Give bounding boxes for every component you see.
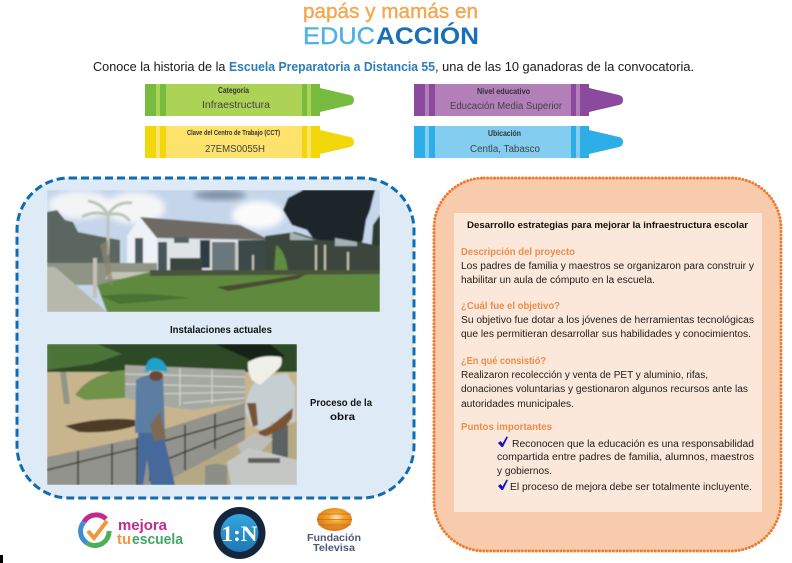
logo tagline: papás y mamás en (303, 1, 478, 23)
logo: mejora tu escuela (81, 515, 184, 548)
section: cuál fue el objetivo: que les permitieran desarrollar sus habilidades y conocimientos. (461, 329, 751, 340)
logo: mejora tu escuela: tu (117, 532, 131, 548)
intro sentence: Escuela Preparatoria a Distancia 55 (229, 59, 435, 74)
crayon: clave del centro de trabajo: Clave del Centro de Trabajo (CCT) (187, 130, 280, 137)
crayon: categoría: Categoría (218, 86, 249, 95)
section: cuál fue el objetivo (461, 301, 754, 340)
caption: proceso de la obra: Proceso de la (310, 398, 372, 409)
section: puntos importantes: y gobiernos. (497, 466, 552, 477)
intro sentence: Conoce la historia de la (93, 59, 229, 74)
section: descripción del proyecto: Descripción del proyecto (461, 247, 575, 258)
icon: orange globe (317, 508, 352, 531)
crayon: ubicación: Centla, Tabasco (470, 144, 540, 155)
caption: proceso de la obra: obra (330, 412, 356, 423)
logo: Fundación Televisa (307, 508, 361, 554)
icon: check mark (498, 436, 508, 447)
crayon: ubicación (414, 126, 623, 158)
logo: papás y mamás en EducAcción: ACCIÓN (376, 22, 479, 50)
section: descripción del proyecto: Los padres de familia y maestros se organizaron para construir y (461, 261, 754, 272)
section: descripción del proyecto (461, 247, 754, 286)
section: puntos importantes: El proceso de mejora debe ser totalmente incluyente. (510, 482, 752, 493)
logo: mejora tu escuela: mejora (118, 518, 168, 534)
section: puntos importantes: Reconocen que la educación es una responsabilidad (512, 439, 754, 450)
crayon: clave del centro de trabajo: 27EMS0055H (205, 144, 265, 155)
section: en qué consistió: Realizaron recolección y venta de PET y aluminio, rifas, (461, 370, 708, 381)
section: en qué consistió: autoridades municipales. (461, 399, 574, 410)
crayon: nivel educativo: Nivel educativo (477, 87, 530, 96)
section: puntos importantes: compartida entre padres de familia, alumnos, maestros (497, 452, 754, 463)
section: puntos importantes: Puntos importantes (461, 422, 552, 433)
caption: instalaciones actuales: Instalaciones actuales (170, 325, 272, 336)
logo: Fundación Televisa: Fundación (307, 532, 361, 544)
panel title: Desarrollo estrategias para mejorar la infraestructura escolar (467, 220, 748, 231)
section: en qué consistió: ¿En qué consistió? (461, 356, 546, 367)
panel: fotos de la escuela (17, 178, 414, 498)
section: en qué consistió (461, 356, 748, 410)
logo: 1:N: 1:N (222, 521, 258, 546)
section: puntos importantes (461, 422, 754, 493)
photo: instalaciones actuales (47, 190, 380, 312)
panel: desarrollo de estrategias (434, 178, 781, 551)
crayon: nivel educativo (414, 84, 623, 116)
section: cuál fue el objetivo: ¿Cuál fue el objetivo? (461, 301, 560, 312)
photo: proceso de la obra (47, 344, 297, 485)
section: descripción del proyecto: habilitar un aula de cómputo en la escuela. (461, 275, 655, 286)
icon: colored ring with check (81, 515, 109, 546)
logo: papás y mamás en EducAcción (303, 1, 479, 50)
logo: 1:N (214, 507, 266, 559)
crayon: categoría (145, 84, 354, 116)
crayon: ubicación: Ubicación (488, 129, 521, 138)
section: en qué consistió: donaciones voluntarias y gestionaron algunos recursos ante las (461, 384, 748, 395)
crayon: nivel educativo: Educación Media Superior (450, 101, 563, 112)
logo wordmark: EDUC (303, 23, 375, 50)
caption: proceso de la obra (310, 398, 372, 423)
logo: mejora tu escuela: escuela (132, 532, 184, 548)
section: cuál fue el objetivo: Su objetivo fue dotar a los jóvenes de herramientas tecnológicas (461, 315, 754, 326)
icon: check mark (498, 480, 508, 490)
crayon: clave del centro de trabajo (145, 126, 354, 158)
logo: Fundación Televisa: Televisa (313, 542, 355, 554)
crayon: categoría: Infraestructura (202, 100, 270, 111)
intro sentence: , una de las 10 ganadoras de la convocatoria. (435, 59, 694, 74)
